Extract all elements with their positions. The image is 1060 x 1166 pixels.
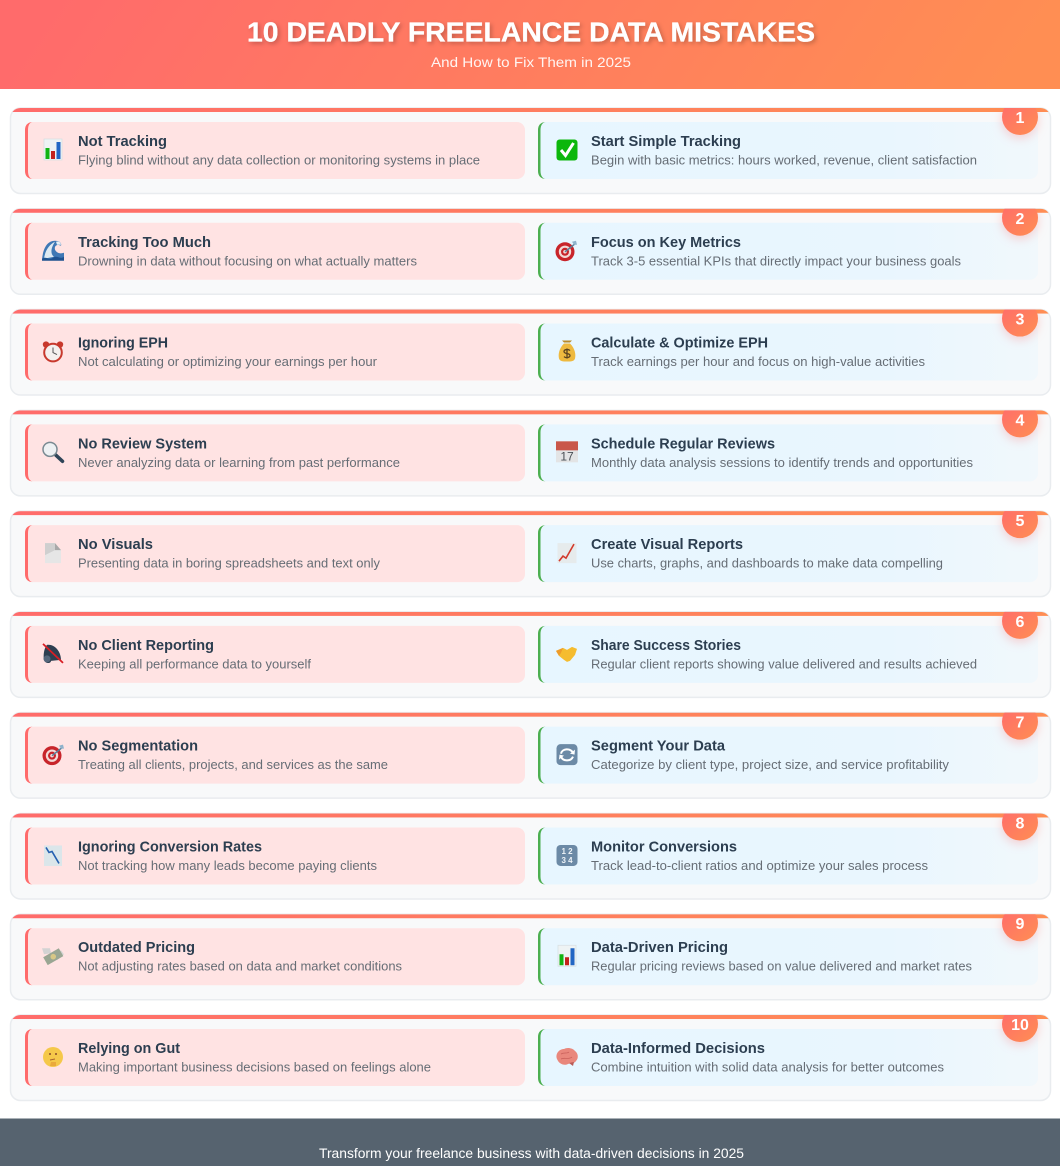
description: Track lead-to-client ratios and optimize your sales process [591, 859, 928, 873]
mistake panel 1 [25, 122, 525, 179]
number badge: 4 [1016, 412, 1025, 429]
heading: Segment Your Data [591, 738, 726, 755]
description: Categorize by client type, project size, and service profitability [591, 758, 950, 772]
number badge [1002, 1006, 1038, 1042]
icon: number tile: 3 4 [561, 856, 573, 865]
description: Track earnings per hour and focus on high-value activities [591, 355, 925, 369]
mistake panel 6 [25, 626, 525, 683]
heading: Ignoring Conversion Rates [78, 838, 262, 855]
icon: handshake [556, 647, 577, 662]
heading: No Segmentation [78, 738, 198, 755]
number badge [1002, 99, 1038, 135]
heading: Ignoring EPH [78, 335, 168, 352]
description: Use charts, graphs, and dashboards to make data compelling [591, 557, 943, 571]
heading: No Visuals [78, 536, 153, 553]
description: Treating all clients, projects, and services as the same [78, 758, 388, 772]
solution panel 8 [538, 827, 1038, 884]
solution panel 10 [538, 1029, 1038, 1086]
icon: falling chart [44, 845, 62, 866]
description: Drowning in data without focusing on what actually matters [78, 254, 417, 268]
solution panel 7 [538, 727, 1038, 784]
heading: Data-Informed Decisions [591, 1040, 765, 1057]
number badge [1002, 704, 1038, 740]
icon: money with wings [42, 948, 64, 965]
icon: calendar: 17 [560, 449, 574, 463]
row 9 [10, 905, 1052, 1000]
number badge [1002, 502, 1038, 538]
heading: Monitor Conversions [591, 838, 737, 855]
description: Never analyzing data or learning from past performance [78, 456, 400, 470]
mistake panel 8 [25, 827, 525, 884]
mistake panel 7 [25, 727, 525, 784]
heading: Tracking Too Much [78, 234, 211, 251]
row 1 [10, 99, 1052, 194]
mistake panel 9 [25, 928, 525, 985]
description: Not calculating or optimizing your earnings per hour [78, 355, 377, 369]
number badge: 6 [1016, 614, 1025, 631]
icon: thinking face [43, 1047, 63, 1067]
footer text: Transform your freelance business with data-driven decisions in 2025 [319, 1146, 744, 1161]
icon: alarm clock [43, 341, 63, 361]
description: Regular pricing reviews based on value delivered and market rates [591, 960, 972, 974]
description: Keeping all performance data to yourself [78, 657, 312, 671]
description: Not tracking how many leads become paying clients [78, 859, 377, 873]
heading: Share Success Stories [591, 637, 741, 654]
number badge [1002, 200, 1038, 236]
number badge: 5 [1016, 513, 1025, 530]
description: Not adjusting rates based on data and market conditions [78, 960, 402, 974]
row 10 [10, 1006, 1052, 1101]
icon: money bag [559, 341, 575, 362]
row 3 [10, 301, 1052, 395]
solution panel 3 [538, 324, 1038, 381]
icon: document [45, 543, 61, 563]
number badge: 9 [1016, 916, 1025, 933]
icon: wave [42, 241, 64, 261]
mistake panel 10 [25, 1029, 525, 1086]
icon: refresh arrows [556, 744, 578, 765]
description: Begin with basic metrics: hours worked, revenue, client satisfaction [591, 154, 977, 168]
heading: Schedule Regular Reviews [591, 435, 775, 452]
icon: muted speaker [43, 644, 63, 663]
heading: Not Tracking [78, 133, 167, 150]
description: Making important business decisions based on feelings alone [78, 1061, 431, 1075]
description: Flying blind without any data collection or monitoring systems in place [78, 154, 480, 168]
solution panel 5 [538, 525, 1038, 582]
row 5 [10, 502, 1052, 597]
solution panel 6 [538, 626, 1038, 683]
row 7 [10, 704, 1052, 798]
icon: number tile: 1 2 [561, 847, 573, 856]
number badge [1002, 603, 1038, 639]
icon: bar chart [558, 945, 576, 966]
mistake panel 2 [25, 223, 525, 280]
number badge: 2 [1016, 211, 1025, 228]
heading: Focus on Key Metrics [591, 234, 741, 251]
row 8 [10, 804, 1052, 899]
heading: Start Simple Tracking [591, 133, 741, 150]
solution panel 2 [538, 223, 1038, 280]
description: Track 3-5 essential KPIs that directly impact your business goals [591, 254, 961, 268]
solution panel 1 [538, 122, 1038, 179]
icon: rising chart [558, 543, 576, 563]
number badge: 8 [1016, 815, 1025, 832]
title: 10 DEADLY FREELANCE DATA MISTAKES [247, 16, 815, 48]
heading: Create Visual Reports [591, 536, 743, 553]
number badge [1002, 401, 1038, 437]
solution panel 4 [538, 424, 1038, 481]
header banner [0, 0, 1060, 89]
icon: target [556, 241, 577, 261]
icon: brain [556, 1048, 578, 1066]
heading: No Review System [78, 435, 207, 452]
solution panel 9 [538, 928, 1038, 985]
description: Monthly data analysis sessions to identify trends and opportunities [591, 456, 973, 470]
number badge [1002, 905, 1038, 941]
number badge: 3 [1016, 312, 1025, 329]
heading: Calculate & Optimize EPH [591, 335, 768, 352]
number badge: 1 [1016, 110, 1025, 127]
heading: Data-Driven Pricing [591, 939, 728, 956]
subtitle: And How to Fix Them in 2025 [431, 54, 631, 70]
number badge [1002, 804, 1038, 840]
number badge: 10 [1011, 1017, 1029, 1034]
icon: number tile [556, 845, 578, 866]
row 4 [10, 401, 1052, 496]
mistake panel 4 [25, 424, 525, 481]
icon: magnifying glass [43, 442, 62, 461]
mistake panel 5 [25, 525, 525, 582]
number badge: 7 [1016, 715, 1025, 732]
heading: Outdated Pricing [78, 939, 195, 956]
heading: No Client Reporting [78, 637, 214, 654]
icon: bar chart [44, 139, 62, 160]
heading: Relying on Gut [78, 1040, 180, 1057]
icon: target [42, 745, 64, 765]
mistake panel 3 [25, 324, 525, 381]
icon: calendar [556, 441, 578, 463]
footer [0, 1118, 1060, 1166]
description: Combine intuition with solid data analysis for better outcomes [591, 1061, 944, 1075]
row 6 [10, 603, 1052, 697]
number badge [1002, 301, 1038, 337]
row 2 [10, 200, 1052, 294]
icon: check mark [556, 140, 578, 160]
description: Presenting data in boring spreadsheets and text only [78, 557, 381, 571]
description: Regular client reports showing value delivered and results achieved [591, 657, 977, 671]
